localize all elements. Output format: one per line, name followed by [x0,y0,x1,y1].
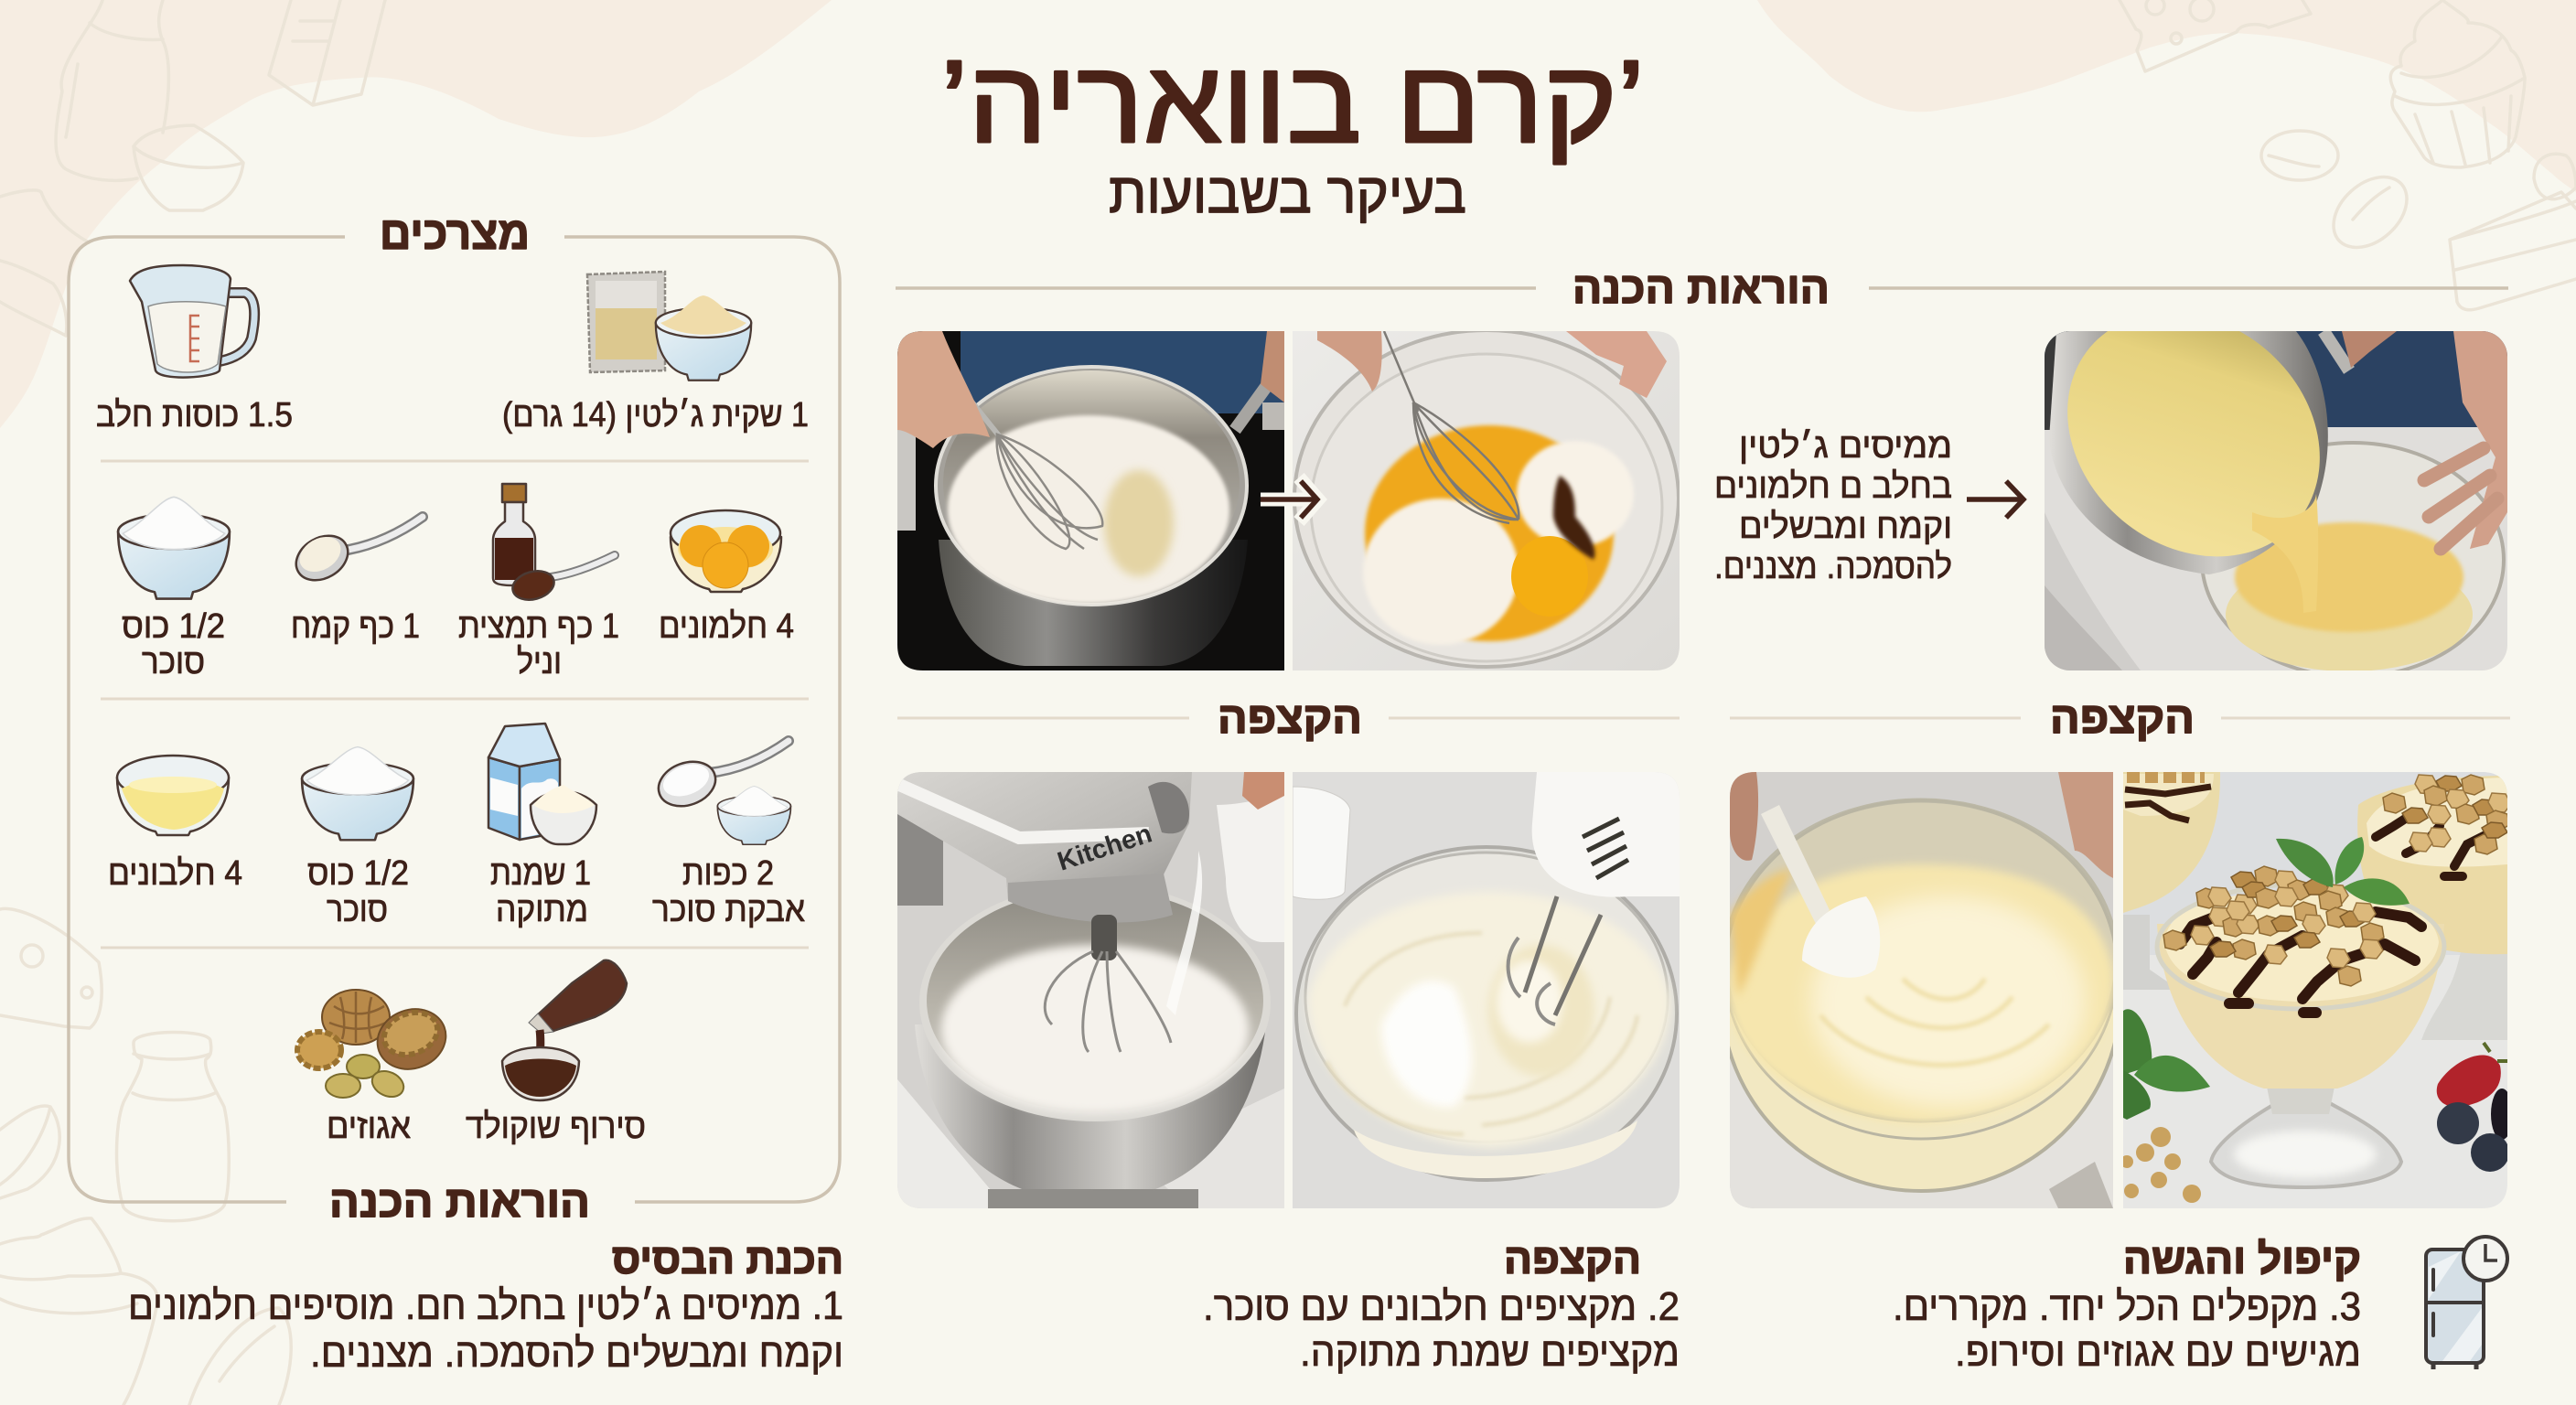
step 3 text: 3. מקפלים הכל יחד. מקררים. [1893,1284,2361,1329]
icon: vanilla extract bottle and spoon [493,484,615,604]
icon: spoon and bowl of powdered sugar [652,741,790,844]
arrow: photo 1 to photo 2 [1261,477,1318,521]
heading: ingredients: מצרכים [380,208,530,259]
icon: gelatin packet and bowl [587,272,751,381]
label: chocolate syrup: סירוף שוקולד [466,1108,646,1146]
arrow: text to photo 3 [1967,481,2023,518]
label: powdered sugar [652,854,805,929]
label: vanilla [458,607,619,681]
glass: back left [2123,772,2220,990]
photo: whisking gelatin into milk [897,331,1284,670]
label: gelatin: 1 שקית ג׳לטין (14 גרם) [502,396,809,434]
icon: chocolate syrup bottle pouring into cup [502,960,627,1100]
icon: walnuts and pistachios [297,990,455,1101]
icon: bowl of sugar [118,497,230,599]
icon: bowl of sugar [302,747,413,840]
label: milk: 1.5 כוסות חלב [96,396,293,434]
step text: בחלב ם חלמונים [1714,467,1952,506]
photo: hand mixer with powdered sugar [1293,772,1680,1208]
photo: pouring custard into bowl [2045,331,2507,670]
step 2 text: 2. מקציפים חלבונים עם סוכר. [1203,1284,1680,1329]
photo: yolks, flour and vanilla in bowl [1293,330,1680,670]
chopped nuts [2163,866,2384,986]
label: nuts: אגוזים [327,1108,411,1146]
label: yolks: 4 חלמונים [659,607,794,646]
step 3 text: קיפול והגשה [2123,1235,2361,1282]
step 1 text: 1. ממיסים ג׳לטין בחלב חם. מוסיפים חלמונים [128,1283,843,1328]
glass: back right [2357,775,2511,1040]
chocolate drizzle [2180,912,2421,1013]
icon: fridge with clock [2426,1237,2507,1369]
step 1 text: הכנת הבסיס [612,1235,843,1282]
step 3 text: מגישים עם אגוזים וסירופ. [1955,1330,2361,1375]
label: sugar: 1/2 כוס [307,854,409,893]
scattered nuts [2120,1127,2201,1203]
heading: preparation (left column): הוראות הכנה [329,1178,590,1227]
label: sugar: סוכר [327,891,388,929]
icon: cream carton and cup [488,724,596,844]
step text: וקמח ומבשלים [1739,508,1952,546]
photo: finished dessert with nuts and chocolate [2120,772,2513,1208]
icon: egg whites in bowl [117,756,229,835]
photo: stand mixer whipping egg whites: Kitchen [1054,819,1155,877]
title: ’קרם בוואריה’ [940,37,1645,167]
label: vanilla: וניל [517,643,562,681]
label: powdered sugar: 2 כפות [682,854,774,893]
label: sugar: סוכר [142,643,205,681]
decorative food doodles: top left [0,0,385,336]
heading: whipping (right): הקצפה [2050,694,2195,743]
decorative food doodles: top right [2120,0,2576,310]
icon: egg yolks in bowl [671,510,781,592]
photo: folding mixture with spatula [1722,772,2120,1208]
step 2 text: הקצפה [1504,1235,1641,1282]
label: sugar: 1/2 כוס [122,607,225,646]
step 1 text [128,1235,843,1376]
step 3 text [1893,1235,2361,1375]
decorative food doodles: bottom left [0,908,291,1405]
foot [2211,1087,2401,1187]
photo: stand mixer whipping egg whites [897,772,1284,1208]
subtitle: בעיקר בשבועות [1109,162,1466,225]
step text: להסמכה. מצננים. [1714,548,1952,586]
label: cream: 1 שמנת [490,854,591,893]
panel frame [69,237,840,1202]
berries [2437,1043,2513,1172]
icon: spoon of flour [288,517,423,589]
label: sugar [307,854,409,929]
heading: preparation (top right): הוראות הכנה [1572,264,1830,313]
mint lower left [2123,1009,2210,1120]
label: cream: מתוקה [496,891,588,929]
glass: front bowl [2157,924,2444,1089]
step 2 text [1203,1235,1680,1375]
icon: measuring jug of milk [130,265,254,378]
step text [1714,427,1952,586]
label: sugar [122,607,225,681]
step text: ממיסים ג׳לטין [1739,427,1952,466]
mint [2276,837,2410,906]
label: flour: 1 כף קמח [291,607,420,646]
step 1 text: וקמח ומבשלים להסמכה. מצננים. [310,1331,843,1376]
label: powdered sugar: אבקת סוכר [652,891,805,929]
heading: whipping (center): הקצפה [1218,694,1362,743]
label: vanilla: 1 כף תמצית [458,607,619,646]
label: egg whites: 4 חלבונים [108,854,242,893]
step 2 text: מקציפים שמנת מתוקה. [1300,1330,1680,1375]
label: cream [490,854,591,929]
panel: ingredients [69,208,840,1202]
